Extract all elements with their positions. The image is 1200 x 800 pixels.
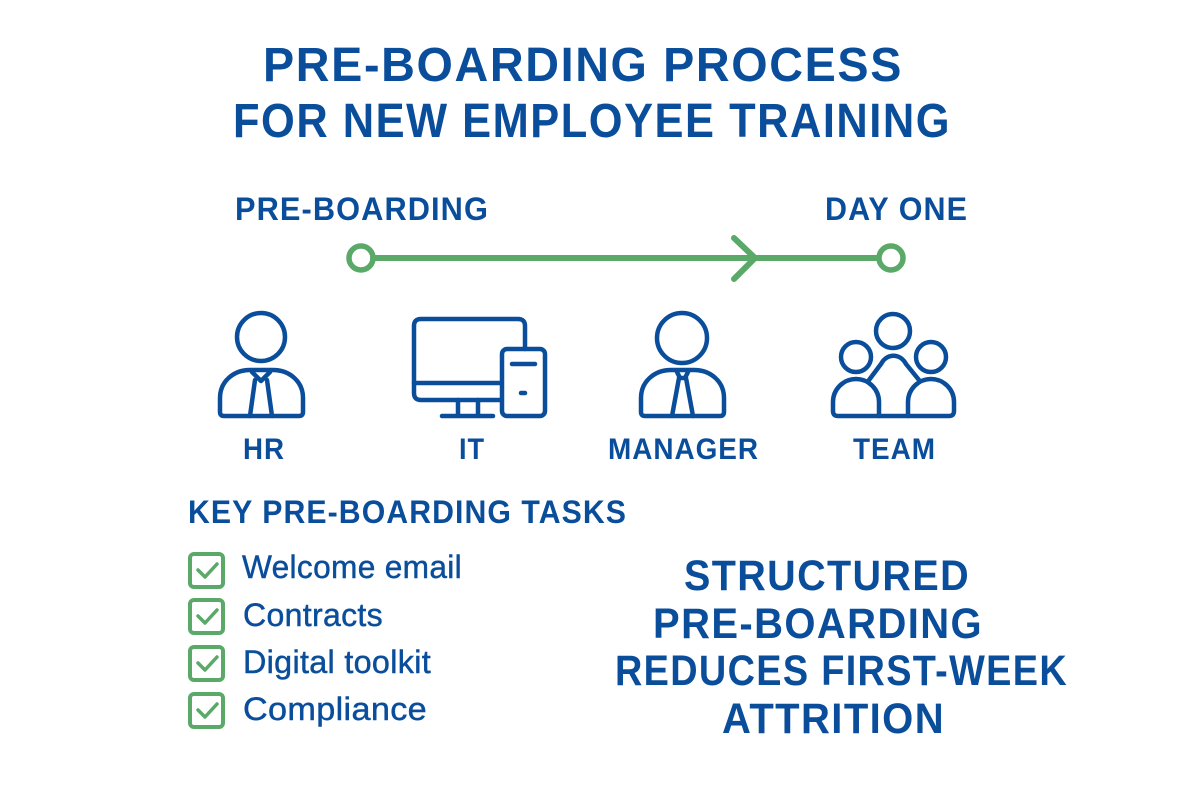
icon: manager person	[641, 313, 724, 416]
icon: team	[833, 314, 954, 416]
label: HR: HR	[243, 433, 285, 466]
callout: takeaway: STRUCTURED	[684, 552, 970, 600]
callout: takeaway: ATTRITION	[722, 695, 945, 743]
icon: HR person	[220, 313, 303, 416]
callout: takeaway	[615, 552, 1068, 743]
timeline arrow	[349, 238, 903, 279]
title	[233, 39, 951, 148]
callout: takeaway: PRE-BOARDING	[653, 600, 983, 648]
label: IT: IT	[459, 433, 485, 466]
label: MANAGER: MANAGER	[608, 433, 759, 466]
title: PRE-BOARDING PROCESS	[263, 39, 903, 92]
task: contracts: Contracts	[243, 597, 383, 633]
callout: takeaway: REDUCES FIRST-WEEK	[615, 647, 1068, 695]
checklist	[190, 549, 462, 727]
timeline label: day one: DAY ONE	[825, 191, 968, 227]
label: TEAM: TEAM	[853, 433, 936, 466]
title: FOR NEW EMPLOYEE TRAINING	[233, 95, 951, 148]
task: compliance: Compliance	[243, 691, 427, 727]
icon: computer and tower	[414, 319, 545, 416]
task: welcome email: Welcome email	[242, 549, 462, 585]
heading: key pre-boarding tasks: KEY PRE-BOARDING TASKS	[188, 494, 627, 530]
timeline label: pre-boarding: PRE-BOARDING	[235, 191, 489, 227]
task: digital toolkit: Digital toolkit	[243, 644, 431, 680]
